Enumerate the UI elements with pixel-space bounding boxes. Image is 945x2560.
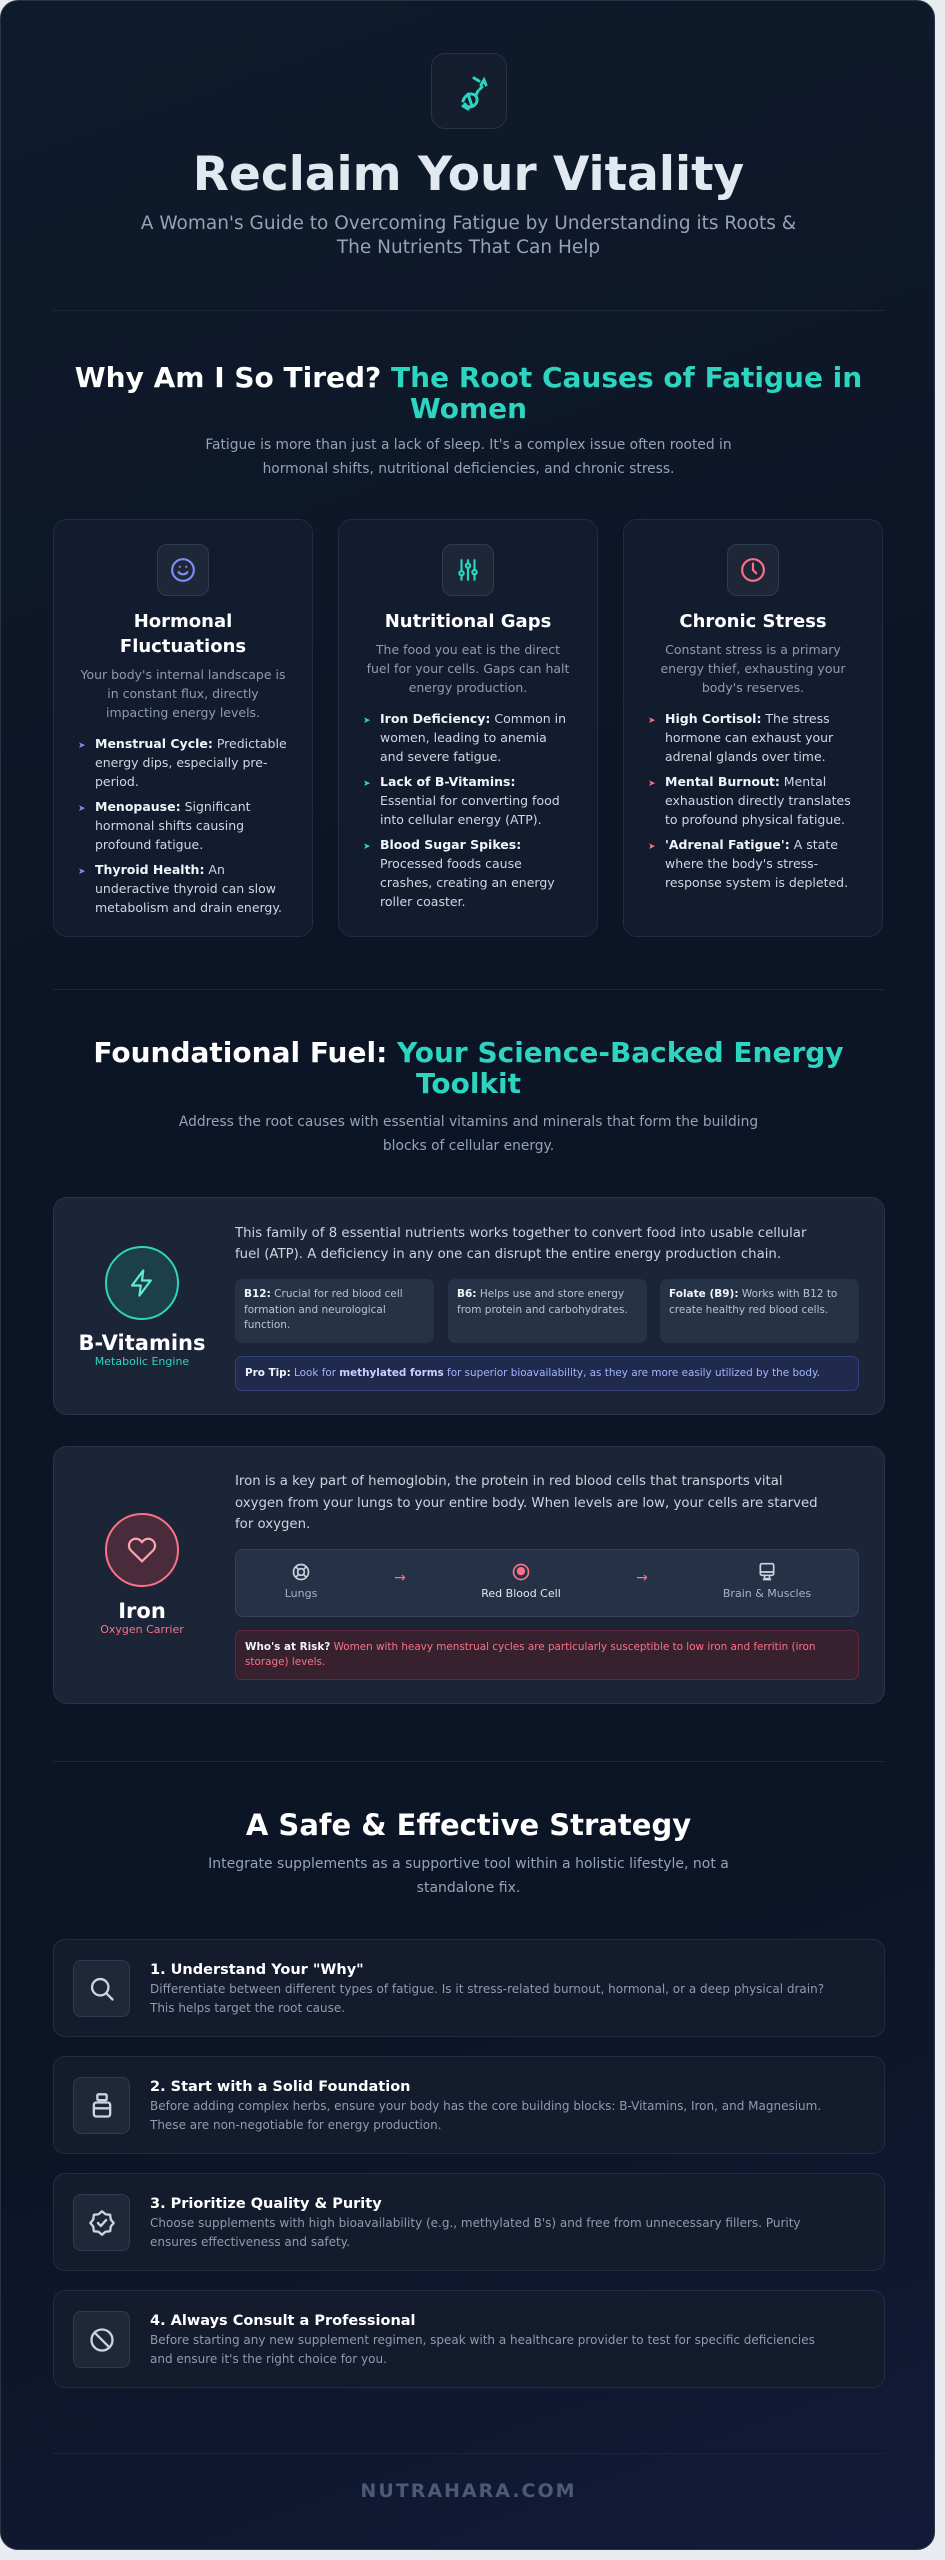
icon: lightning circle xyxy=(105,1246,179,1320)
panel: nutritional gaps: ➤ xyxy=(363,716,371,726)
section description: causes: Fatigue is more than just a lack of sleep. It's a complex issue often rooted in xyxy=(205,437,732,453)
step 1: This helps target the root cause. xyxy=(150,2001,345,2015)
step 4: 4. Always Consult a Professional xyxy=(150,2313,416,2329)
heading: foundational fuel: Foundational Fuel: Your Science-Backed Energy xyxy=(93,1036,844,1069)
section description: strategy: standalone fix. xyxy=(417,1880,520,1896)
label: Iron: Iron xyxy=(118,1599,166,1623)
heading: foundational fuel xyxy=(93,1036,844,1100)
icon: smiley xyxy=(157,544,209,596)
sub-box: B12: B12: Crucial for red blood cell formation and neurological function. xyxy=(244,1288,403,1331)
title: Reclaim Your Vitality xyxy=(193,147,744,202)
panel: iron: Oxygen Carrier xyxy=(100,1623,184,1636)
icon: ban xyxy=(73,2311,130,2368)
text: B-vitamins description: This family of 8 essential nutrients works together to convert food into usable cellular xyxy=(235,1226,806,1241)
step 3: Choose supplements with high bioavailability (e.g., methylated B's) and free from unnecessary fillers. Purity xyxy=(150,2216,801,2230)
flow diagram: oxygen path xyxy=(235,1549,859,1617)
subtitle: The Nutrients That Can Help xyxy=(337,237,600,258)
section description: strategy xyxy=(208,1856,729,1896)
footer: NUTRAHARA.COM xyxy=(360,2480,577,2502)
step 1: Differentiate between different types of fatigue. Is it stress-related burnout, hormonal, or a deep physical drain? xyxy=(150,1982,824,1996)
panel: hormonal fluctuations: ➤ xyxy=(78,867,86,877)
icon: badge check xyxy=(73,2194,130,2251)
icon: heart circle xyxy=(105,1513,179,1587)
sub-box: folate: Folate (B9): Works with B12 to create healthy red blood cells. xyxy=(669,1288,837,1316)
text: iron description: for oxygen. xyxy=(235,1517,310,1532)
sub-box: B6: B6: Helps use and store energy from protein and carbohydrates. xyxy=(457,1288,628,1316)
logo icon xyxy=(431,53,507,129)
callout: pro tip xyxy=(235,1356,859,1391)
section description: fuel: blocks of cellular energy. xyxy=(383,1138,554,1154)
arrow: → xyxy=(394,1570,406,1586)
panel: nutritional gaps xyxy=(338,519,598,937)
panel: hormonal fluctuations: Menstrual Cycle: Predictable energy dips, especially pre-period. xyxy=(95,736,287,789)
panel: B-vitamins xyxy=(53,1197,885,1415)
panel: hormonal fluctuations: Hormonal xyxy=(134,611,232,632)
icon: lungs: Lungs xyxy=(285,1587,317,1600)
panel: hormonal fluctuations: Fluctuations xyxy=(120,636,246,657)
icon: red blood cell xyxy=(481,1564,561,1600)
callout: who's at risk xyxy=(235,1630,859,1680)
subtitle xyxy=(141,213,796,258)
section description: fuel xyxy=(179,1114,758,1154)
text: iron description: oxygen from your lungs to your entire body. When levels are low, your cells are starved xyxy=(235,1496,818,1510)
panel: hormonal fluctuations: ➤ xyxy=(78,741,86,751)
sub-box: B6 xyxy=(448,1279,647,1343)
sub-box: folate xyxy=(660,1279,859,1343)
panel: chronic stress: Chronic Stress xyxy=(679,611,827,632)
panel: nutritional gaps: ➤ xyxy=(363,842,371,852)
panel: B-vitamins: Metabolic Engine xyxy=(95,1355,189,1368)
step 2 xyxy=(53,2056,885,2154)
icon: brain & muscles: Brain & Muscles xyxy=(723,1587,811,1600)
section description: strategy: Integrate supplements as a supportive tool within a holistic lifestyle, not a xyxy=(208,1856,729,1872)
panel: hormonal fluctuations xyxy=(53,519,313,937)
heading: root causes: Why Am I So Tired? The Root Causes of Fatigue in xyxy=(75,361,862,394)
step 1: 1. Understand Your "Why" xyxy=(150,1962,364,1978)
callout: who's at risk: Who's at Risk? Women with heavy menstrual cycles are particularly susceptible to low iron and ferritin (iron storage) levels. xyxy=(245,1641,815,1668)
step 3: 3. Prioritize Quality & Purity xyxy=(150,2196,382,2212)
section description: fuel: Address the root causes with essential vitamins and minerals that form the building xyxy=(179,1114,758,1130)
icon: lungs xyxy=(285,1564,317,1600)
icon: search xyxy=(73,1960,130,2017)
panel: chronic stress: 'Adrenal Fatigue': A state where the body's stress-response system is depleted. xyxy=(665,837,848,890)
section description: causes: hormonal shifts, nutritional deficiencies, and chronic stress. xyxy=(263,460,674,476)
icon: sliders xyxy=(442,544,494,596)
panel: chronic stress: ➤ xyxy=(648,779,656,789)
panel: chronic stress: ➤ xyxy=(648,842,656,852)
panel: hormonal fluctuations: Thyroid Health: An underactive thyroid can slow metabolism and drain energy. xyxy=(95,862,282,915)
arrow: → xyxy=(636,1570,648,1586)
step 2: These are non-negotiable for energy production. xyxy=(150,2118,442,2132)
panel: nutritional gaps: The food you eat is the direct fuel for your cells. Gaps can halt energy production. xyxy=(367,642,569,695)
step 3 xyxy=(53,2173,885,2271)
step 2: Before adding complex herbs, ensure your body has the core building blocks: B-Vitamins, Iron, and Magnesium. xyxy=(150,2099,821,2113)
icon: clock xyxy=(727,544,779,596)
panel: chronic stress xyxy=(623,519,883,937)
panel: hormonal fluctuations: Menopause: Significant hormonal shifts causing profound fatigue. xyxy=(95,799,251,852)
step 1 xyxy=(53,1939,885,2037)
panel: iron xyxy=(53,1446,885,1704)
text: iron description: Iron is a key part of hemoglobin, the protein in red blood cells that transports vital xyxy=(235,1474,783,1489)
section description: causes xyxy=(205,437,732,476)
step 4: Before starting any new supplement regimen, speak with a healthcare provider to test for specific deficiencies xyxy=(150,2333,815,2347)
panel: chronic stress: Constant stress is a primary energy thief, exhausting your body's reserves. xyxy=(660,642,846,695)
text: B-vitamins description xyxy=(234,1226,806,1262)
heading: root causes xyxy=(75,361,862,425)
panel: hormonal fluctuations: ➤ xyxy=(78,804,86,814)
sub-box: B12 xyxy=(235,1279,434,1343)
step 3: ensures effectiveness and safety. xyxy=(150,2235,350,2249)
label: B-Vitamins: B-Vitamins xyxy=(78,1331,206,1355)
callout: pro tip: Pro Tip: Look for methylated forms for superior bioavailability, as they are more easily utilized by the body. xyxy=(245,1367,820,1379)
icon: jar xyxy=(73,2077,130,2134)
panel: chronic stress: High Cortisol: The stress hormone can exhaust your adrenal glands over time. xyxy=(665,711,833,764)
text: B-vitamins description: fuel (ATP). A deficiency in any one can disrupt the entire energy production chain. xyxy=(235,1247,781,1262)
panel: nutritional gaps: Iron Deficiency: Common in women, leading to anemia and severe fatigue. xyxy=(380,711,566,764)
heading: root causes: Women xyxy=(410,392,527,425)
panel: chronic stress: ➤ xyxy=(648,716,656,726)
panel: hormonal fluctuations: Your body's internal landscape is in constant flux, directly impacting energy levels. xyxy=(80,667,286,720)
text: iron description xyxy=(235,1474,818,1532)
panel: nutritional gaps: Lack of B-Vitamins: Essential for converting food into cellular energy (ATP). xyxy=(380,774,560,827)
step 2: 2. Start with a Solid Foundation xyxy=(150,2079,410,2095)
panel: nutritional gaps: Nutritional Gaps xyxy=(385,611,551,632)
panel: chronic stress: Mental Burnout: Mental exhaustion directly translates to profound physical fatigue. xyxy=(665,774,851,827)
step 4: and ensure it's the right choice for you. xyxy=(150,2352,387,2366)
icon: brain & muscles xyxy=(723,1562,811,1600)
panel: nutritional gaps: ➤ xyxy=(363,779,371,789)
icon: red blood cell: Red Blood Cell xyxy=(481,1587,561,1600)
heading: strategy: A Safe & Effective Strategy xyxy=(246,1808,691,1842)
step 4 xyxy=(53,2290,885,2388)
panel: nutritional gaps: Blood Sugar Spikes: Processed foods cause crashes, creating an energy roller coaster. xyxy=(380,837,555,909)
heading: foundational fuel: Toolkit xyxy=(416,1067,521,1100)
subtitle: A Woman's Guide to Overcoming Fatigue by Understanding its Roots & xyxy=(141,213,796,234)
